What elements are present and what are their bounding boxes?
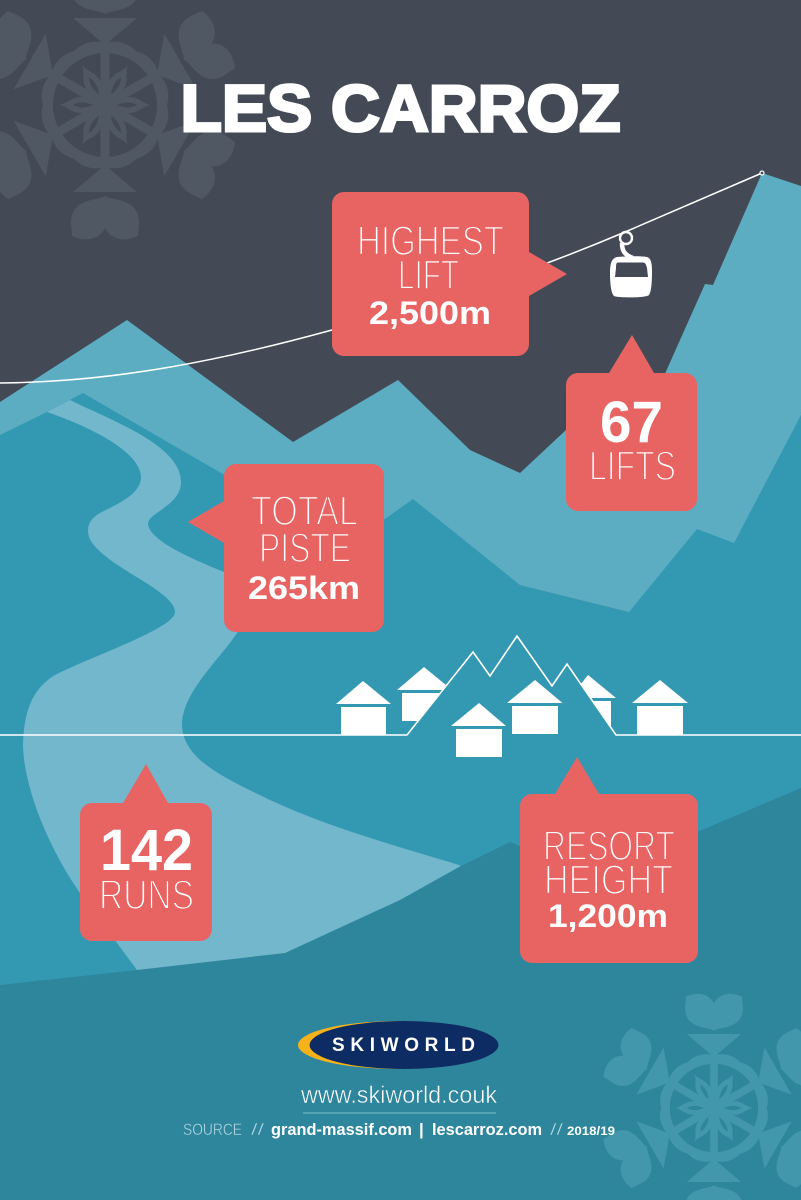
logo: Skiworld	[298, 1021, 498, 1069]
callout: total piste: TOTAL	[251, 487, 358, 534]
village: mountain outline and chalets	[0, 636, 801, 757]
chalet centre low	[451, 703, 506, 757]
callout: total piste: PISTE	[259, 524, 351, 571]
chalet left	[336, 681, 391, 735]
cable end point	[760, 171, 764, 175]
callout: resort height: HEIGHT	[544, 856, 673, 903]
ski piste	[23, 400, 480, 970]
source line: //	[251, 1120, 264, 1139]
callout: lifts: 67	[600, 390, 663, 455]
source line: |	[419, 1120, 424, 1139]
logo: Skiworld: SKIWORLD	[332, 1035, 475, 1056]
callout: highest lift: 2,500m	[369, 295, 491, 331]
mountain outline	[0, 636, 801, 735]
source line: grand-massif.com	[271, 1120, 412, 1139]
callout: resort height	[520, 757, 698, 963]
icon: gondola	[610, 232, 652, 297]
source line: //	[550, 1120, 563, 1139]
source line: 2018/19	[567, 1124, 615, 1138]
cable car line	[0, 173, 762, 383]
callout: total piste	[188, 464, 384, 632]
title: LES CARROZ	[180, 71, 620, 145]
callout: highest lift: LIFT	[398, 251, 459, 298]
middle slope	[0, 393, 801, 1000]
source line: lescarroz.com	[432, 1120, 542, 1139]
callout: resort height: RESORT	[543, 822, 675, 869]
callout: highest lift	[332, 192, 567, 356]
chalet centre right	[507, 680, 562, 734]
back mountain range	[0, 173, 801, 620]
callout: runs: 142	[100, 818, 193, 883]
chalet right	[632, 680, 688, 735]
website url: www.skiworld.couk	[300, 1082, 498, 1109]
chalet behind left	[397, 667, 452, 721]
foreground slope	[0, 788, 801, 1200]
callout: runs	[80, 764, 212, 941]
callout: lifts: LIFTS	[589, 442, 676, 489]
callout: lifts	[566, 335, 697, 511]
divider under url	[303, 1112, 496, 1114]
callout: resort height: 1,200m	[548, 898, 668, 934]
callout: highest lift: HIGHEST	[357, 217, 504, 264]
callout: total piste: 265km	[248, 570, 360, 606]
icon: snowflake bottom right	[601, 994, 801, 1200]
icon: snowflake top left	[0, 0, 238, 239]
callout: runs: RUNS	[99, 871, 194, 918]
source line: SOURCE	[183, 1120, 242, 1139]
source line	[183, 1120, 615, 1139]
chalet behind right	[570, 675, 616, 735]
